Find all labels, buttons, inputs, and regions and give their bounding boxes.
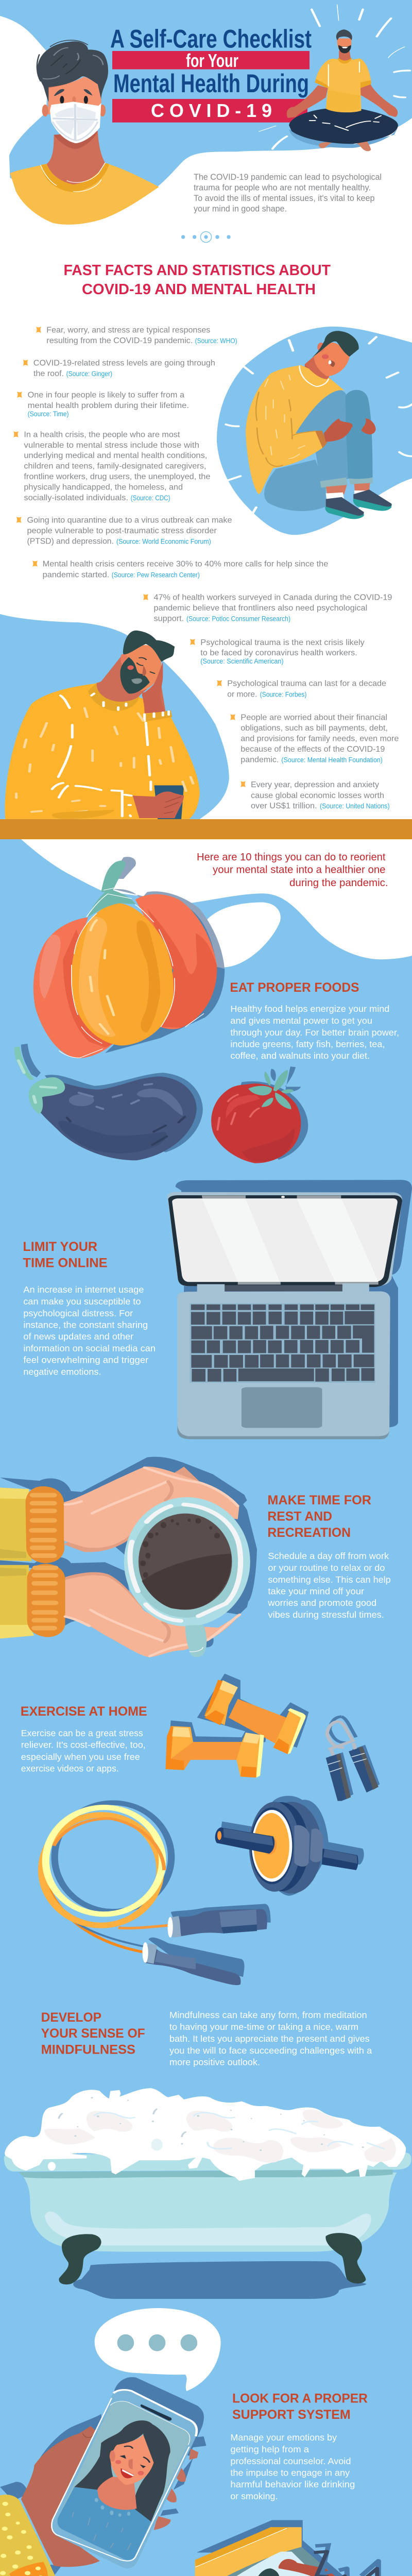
- fact: vulnerable people: [13, 431, 210, 502]
- heading: EXERCISE AT HOME: [21, 1704, 147, 1719]
- heading: [267, 1493, 371, 1540]
- body text: Healthy food helps energize your mind: [230, 1004, 389, 1014]
- intro to 10 things: your mental state into a healthier one: [213, 865, 385, 876]
- fact: fear and worry: resulting from the COVID-19 pandemic.: [46, 336, 193, 345]
- fact: next crisis: Psychological trauma is the next crisis likely: [200, 638, 365, 647]
- body text: the impulse to engage in any: [230, 2468, 350, 2478]
- fact: economic losses: over US$1 trillion.: [251, 802, 317, 810]
- speech bubble with three dots: [95, 2308, 221, 2391]
- body text: especially when you use free: [21, 1752, 140, 1762]
- illustration: bell pepper: [33, 857, 225, 1058]
- intro paragraph: your mind in good shape.: [194, 204, 287, 213]
- heading: LIMIT YOUR: [23, 1240, 97, 1254]
- body text: something else. This can help: [268, 1574, 391, 1585]
- section: limit your time online: [23, 1240, 156, 1377]
- fact: stress levels: (Source: Ginger): [66, 370, 112, 378]
- heading: MINDFULNESS: [41, 2043, 135, 2057]
- illustration: tomato: [211, 1066, 308, 1163]
- fact: economic losses: Every year, depression and anxiety: [251, 781, 379, 789]
- illustration: man meditating with rays: [259, 5, 410, 151]
- body text: Mindfulness can take any form, from meditation: [169, 2010, 367, 2020]
- illustration: ab roller wheel: [215, 1796, 364, 1896]
- body text: reliever. It's cost-effective, too,: [21, 1739, 146, 1750]
- fact: economic losses: [241, 781, 390, 810]
- illustration: man wearing a mask: [10, 40, 159, 225]
- heading: fast facts: [64, 262, 331, 298]
- body text: Schedule a day off from work: [268, 1551, 389, 1561]
- intro paragraph: To avoid the ills of mental issues, it's vital to keep: [194, 194, 375, 203]
- illustration: eggplant: [14, 1044, 203, 1160]
- fact: financial obligations: (Source: Mental Health Foundation): [281, 756, 383, 764]
- heading: LOOK FOR A PROPER: [232, 2392, 368, 2406]
- body text: take your mind off your: [268, 1586, 364, 1597]
- fact: health workers Canada: pandemic believe that frontliners also need psychological: [153, 604, 367, 613]
- intro to 10 things: during the pandemic.: [289, 877, 388, 889]
- heading: [23, 1240, 108, 1270]
- body text: [169, 2010, 372, 2067]
- fact: crisis centers: [32, 560, 328, 579]
- table top: [0, 819, 412, 839]
- section: eat proper foods: [230, 980, 399, 1061]
- fact: decade: (Source: Forbes): [260, 690, 306, 699]
- fact: crisis centers: Mental health crisis centers receive 30% to 40% more calls for help since the: [43, 560, 328, 569]
- body text: coffee, and walnuts into your diet.: [230, 1050, 370, 1061]
- fact: health workers Canada: 47% of health workers surveyed in Canada during the COVID-19: [153, 594, 392, 602]
- fact: vulnerable people: In a health crisis, the people who are most: [24, 431, 180, 439]
- fact: health workers Canada: [143, 594, 392, 623]
- heading: REST AND: [267, 1510, 332, 1524]
- body text: more positive outlook.: [169, 2057, 260, 2067]
- section: develop your sense of mindfulness: [41, 2010, 372, 2067]
- fact: one in four: [17, 391, 189, 418]
- fact: economic losses: cause global economic losses worth: [251, 791, 384, 800]
- fact: health workers Canada: support.: [153, 615, 184, 623]
- background: main blue body: [0, 826, 412, 2576]
- heading: fast facts: COVID-19 AND MENTAL HEALTH: [82, 281, 316, 298]
- heading: TIME ONLINE: [23, 1256, 108, 1270]
- illustration: sad man hugging knees: [226, 331, 412, 519]
- fact: quarantine: Going into quarantine due to a virus outbreak can make: [27, 516, 232, 525]
- title line 3: Mental Health During: [113, 69, 309, 98]
- heading: YOUR SENSE OF: [41, 2026, 145, 2041]
- body text: feel overwhelming and trigger: [23, 1355, 148, 1365]
- fact: vulnerable people: children and teens, family-designated caregivers,: [24, 462, 206, 471]
- fact: financial obligations: and provisions for family needs, even more: [241, 735, 399, 743]
- background: facts blob right: [217, 327, 412, 535]
- illustration: dumbbells and hand gripper: [165, 1673, 380, 1801]
- body text: to having your me-time or taking a nice, warm: [169, 2022, 358, 2032]
- body text: through your day. For better brain power,: [230, 1027, 399, 1038]
- body text: professional counselor. Avoid: [230, 2456, 351, 2466]
- fact: crisis centers: pandemic started.: [43, 570, 109, 579]
- fact: vulnerable people: (Source: CDC): [131, 494, 170, 502]
- fact: decade: or more.: [227, 690, 257, 699]
- fact: vulnerable people: vulnerable to mental stress include those with: [24, 441, 199, 450]
- illustration: tired man with cup at table: [5, 631, 200, 819]
- title line 2: for Your: [186, 50, 238, 71]
- body text: [21, 1728, 146, 1774]
- heading: MAKE TIME FOR: [267, 1493, 371, 1507]
- body text: of news updates and other: [23, 1331, 133, 1342]
- fact: financial obligations: obligations, such as bill payments, debt,: [241, 724, 388, 733]
- body text: and gives mental power to get you: [230, 1015, 372, 1026]
- heading: RECREATION: [267, 1526, 351, 1540]
- fact: financial obligations: [230, 713, 399, 764]
- body text: can make you susceptible to: [23, 1296, 141, 1307]
- facts list part 1: [13, 326, 328, 579]
- title line 1: A Self-Care Checklist: [110, 25, 312, 54]
- body text: psychological distress. For: [23, 1308, 133, 1318]
- body text: vibes during stressful times.: [268, 1609, 384, 1620]
- fact: financial obligations: pandemic.: [241, 755, 279, 764]
- fact: fear and worry: Fear, worry, and stress are typical responses: [46, 326, 210, 335]
- fact: quarantine: [16, 516, 232, 546]
- background: header blue wave: [0, 0, 412, 206]
- body text: exercise videos or apps.: [21, 1764, 119, 1774]
- heading: SUPPORT SYSTEM: [232, 2408, 351, 2422]
- fact: health workers Canada: (Source: Potloc Consumer Research): [186, 615, 290, 623]
- body text: instance, the constant sharing: [23, 1320, 148, 1330]
- fact: vulnerable people: socially-isolated individuals.: [24, 494, 128, 502]
- fact: economic losses: (Source: United Nations): [320, 802, 390, 810]
- fact: one in four: One in four people is likely to suffer from a: [28, 391, 184, 400]
- body text: harmful behavior like drinking: [230, 2479, 355, 2489]
- red banner 2: [112, 99, 307, 123]
- red banner 1: [112, 51, 310, 69]
- illustration: laptop: [167, 1180, 412, 1439]
- body text: [267, 1551, 391, 1620]
- fact: quarantine: people vulnerable to post-traumatic stress disorder: [27, 527, 217, 535]
- intro paragraph: The COVID-19 pandemic can lead to psychological: [194, 173, 382, 182]
- fact: decade: [217, 680, 386, 699]
- body text: worries and promote good: [267, 1598, 376, 1608]
- fact: vulnerable people: frontline workers, drug users, the unemployed, the: [24, 472, 210, 481]
- illustration: bathtub with foam: [4, 2088, 411, 2299]
- fact: fear and worry: (Source: WHO): [195, 337, 237, 345]
- body text: [23, 1284, 156, 1377]
- fact: vulnerable people: physically handicapped, the homeless, and: [24, 483, 183, 492]
- body text: Exercise can be a great stress: [21, 1728, 143, 1738]
- heading: fast facts: FAST FACTS AND STATISTICS ABOUT: [64, 262, 331, 279]
- fact: crisis centers: (Source: Pew Research Center): [112, 571, 200, 579]
- fact: one in four: mental health problem during their lifetime.: [28, 401, 189, 410]
- fact: financial obligations: because of the effects of the COVID-19: [241, 745, 385, 754]
- section: look for a proper support system: [230, 2392, 368, 2501]
- body text: negative emotions.: [23, 1367, 101, 1377]
- fact: fear and worry: [36, 326, 237, 345]
- body text: getting help from a: [230, 2444, 309, 2454]
- fact: decade: Psychological trauma can last for a decade: [227, 680, 386, 688]
- section: make time for rest and recreation: [267, 1493, 391, 1620]
- body text: or smoking.: [230, 2491, 278, 2501]
- facts list part 2: [143, 594, 399, 810]
- body text: information on social media can: [23, 1343, 156, 1353]
- title block: [110, 25, 312, 123]
- illustration: jump rope: [42, 1803, 271, 1985]
- body text: An increase in internet usage: [23, 1284, 144, 1295]
- title line 4: COVID-19: [151, 100, 272, 121]
- fact: one in four: (Source: Time): [28, 410, 69, 418]
- fact: stress levels: COVID-19-related stress levels are going through: [33, 359, 215, 368]
- section: exercise at home: [21, 1704, 147, 1774]
- illustration: hands holding coffee cup: [0, 1457, 257, 1657]
- body text: Manage your emotions by: [230, 2432, 337, 2443]
- body text: or your routine to relax or do: [268, 1563, 385, 1573]
- fact: quarantine: (PTSD) and depression.: [27, 537, 114, 546]
- divider dots: [181, 232, 231, 242]
- heading: EAT PROPER FOODS: [230, 980, 359, 995]
- fact: vulnerable people: underlying medical and mental health conditions,: [24, 451, 207, 460]
- body text: [230, 1004, 399, 1061]
- heading: [41, 2010, 145, 2057]
- fact: next crisis: [190, 638, 365, 665]
- fact: next crisis: to be faced by coronavirus health workers.: [200, 649, 357, 657]
- fact: next crisis: (Source: Scientific American): [200, 657, 283, 665]
- intro to 10 things: [197, 852, 388, 889]
- heading: DEVELOP: [41, 2010, 101, 2025]
- body text: [230, 2432, 355, 2501]
- fact: financial obligations: People are worried about their financial: [241, 713, 387, 722]
- body text: include greens, fatty fish, berries, tea,: [230, 1039, 385, 1049]
- background: blob behind tired man: [0, 614, 229, 819]
- fact: stress levels: the roof.: [33, 369, 64, 378]
- intro paragraph: [194, 173, 382, 213]
- fact: quarantine: (Source: World Economic Forum): [116, 537, 211, 545]
- body text: you the will to face succeeding challenges with a: [169, 2045, 372, 2056]
- intro paragraph: trauma for people who are not mentally healthy.: [194, 183, 371, 192]
- illustration: man sleeping in bed: [195, 2520, 412, 2576]
- heading: [232, 2392, 368, 2422]
- body text: bath. It lets you appreciate the present and gives: [169, 2033, 370, 2044]
- intro to 10 things: Here are 10 things you can do to reorient: [197, 852, 386, 863]
- fact: stress levels: [23, 359, 215, 378]
- illustration: hand holding phone with video call: [0, 2377, 207, 2576]
